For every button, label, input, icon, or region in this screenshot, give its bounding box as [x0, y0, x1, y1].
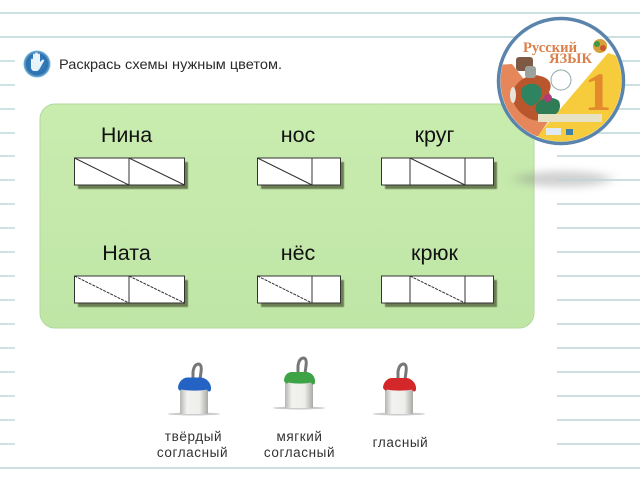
disc: textbook CD: [495, 18, 630, 150]
word: крюк: крюк: [411, 241, 459, 265]
word: Нина: Нина: [101, 123, 152, 147]
scheme: круг: [382, 158, 497, 189]
icon: hand: [24, 50, 50, 78]
word: Ната: Ната: [102, 241, 151, 265]
disc title: Русский: [523, 40, 577, 56]
legend text: hard consonant: твёрдый: [165, 429, 222, 444]
word: круг: круг: [415, 123, 455, 147]
legend text: hard consonant: согласный: [157, 445, 228, 460]
legend text: vowel: гласный: [373, 435, 428, 450]
blurred shadow beside panel: [515, 171, 611, 187]
legend: hard consonant bucket: [168, 364, 220, 416]
scheme: крюк: [382, 276, 497, 307]
panel: word schemes: [40, 104, 534, 328]
legend: vowel bucket: [373, 364, 425, 416]
scheme: Ната: [74, 276, 188, 307]
legend: soft consonant bucket: [273, 358, 325, 410]
scheme: Нина: [74, 158, 188, 189]
scheme: нёс: [258, 276, 344, 307]
disc number: 1: [584, 62, 612, 122]
scheme: нос: [258, 158, 344, 189]
instruction heading: Раскрась схемы нужным цветом.: [59, 57, 282, 72]
disc subtitle: ЯЗЫК: [549, 51, 592, 67]
word: нос: нос: [281, 123, 316, 147]
legend text: soft consonant: согласный: [264, 445, 335, 460]
word: нёс: нёс: [281, 241, 316, 265]
legend text: soft consonant: мягкий: [276, 429, 323, 444]
